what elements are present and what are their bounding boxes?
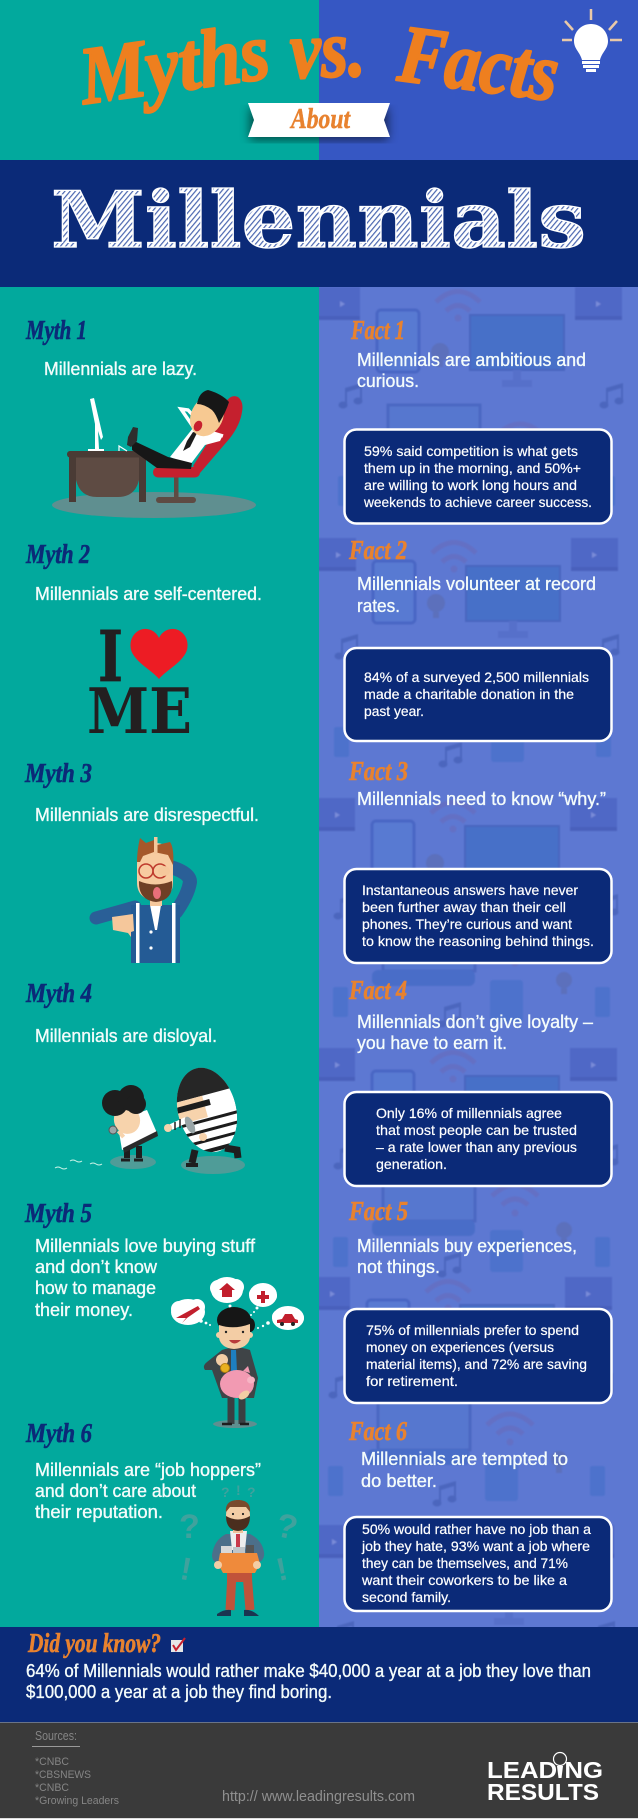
ribbon: About: About bbox=[289, 103, 351, 135]
card: fact 2 detail: past year. bbox=[364, 703, 424, 719]
card: fact 1 detail: 59% said competition is what gets bbox=[364, 443, 578, 459]
logo: Leading Results bbox=[487, 1752, 603, 1805]
text: fact 1 statement: curious. bbox=[357, 370, 419, 391]
card: fact 4 detail: – a rate lower than any previous bbox=[376, 1139, 577, 1155]
heading: Fact 5: Fact 5 bbox=[348, 1196, 408, 1226]
illustration: man carrying box: ? bbox=[273, 1506, 301, 1548]
card: fact 3 detail bbox=[344, 869, 612, 963]
panel: fact 1 bbox=[344, 315, 612, 524]
panel: myth 4 bbox=[25, 978, 256, 1174]
card: fact 1 detail: weekends to achieve career success. bbox=[363, 494, 592, 510]
text: myth 3 statement: Millennials are disrespectful. bbox=[35, 804, 259, 825]
card: fact 6 detail: second family. bbox=[362, 1589, 451, 1605]
card: fact 6 detail: want their coworkers to be like a bbox=[361, 1572, 567, 1588]
illustration: detective and thief bbox=[54, 1068, 245, 1174]
text: fact 5 statement bbox=[357, 1235, 577, 1277]
text: myth 5 statement: their money. bbox=[35, 1299, 133, 1320]
text: fact 1 statement: Millennials are ambitious and bbox=[357, 349, 586, 370]
heading: Did you know?: Did you know? bbox=[27, 1628, 161, 1658]
text: fact 2 statement: Millennials volunteer at record bbox=[357, 573, 596, 594]
text: fact 5 statement: Millennials buy experiences, bbox=[357, 1235, 577, 1256]
card: fact 5 detail: money on experiences (versus bbox=[366, 1339, 554, 1355]
card: fact 5 detail: for retirement. bbox=[366, 1373, 458, 1389]
illustration: man carrying box: ! bbox=[236, 1482, 241, 1498]
text: myth 6 statement bbox=[35, 1459, 261, 1522]
illustration: I love me bbox=[87, 615, 192, 748]
text: myth 6 statement: Millennials are “job hoppers” bbox=[35, 1459, 261, 1480]
card: fact 4 detail: generation. bbox=[376, 1156, 447, 1172]
text: myth 5 statement: and don’t know bbox=[35, 1256, 158, 1277]
heading: Fact 1: Fact 1 bbox=[350, 315, 405, 345]
text: myth 1 statement: Millennials are lazy. bbox=[44, 358, 197, 379]
card: fact 6 detail bbox=[344, 1517, 612, 1611]
text: did you know statement bbox=[26, 1660, 591, 1702]
text: fact 4 statement bbox=[357, 1011, 594, 1053]
text: sources: *Growing Leaders bbox=[35, 1795, 119, 1807]
heading: Fact 2: Fact 2 bbox=[348, 535, 407, 565]
panel: fact 5 bbox=[344, 1196, 612, 1403]
panel: myth 1 bbox=[25, 315, 256, 518]
card: fact 1 detail: are willing to work long hours and bbox=[364, 477, 577, 493]
panel: fact 4 bbox=[344, 975, 612, 1186]
card: fact 1 detail: them up in the morning, and 50%+ bbox=[364, 460, 581, 476]
card: fact 3 detail: phones. They’re curious and want bbox=[362, 916, 572, 932]
card: fact 3 detail: been further away than their cell bbox=[362, 899, 566, 915]
text: fact 6 statement bbox=[361, 1448, 568, 1491]
illustration: man carrying box: ? bbox=[247, 1484, 256, 1500]
card: fact 2 detail: made a charitable donation in the bbox=[364, 686, 574, 702]
illustration: man carrying box: ? bbox=[179, 1508, 200, 1546]
illustration: I love me: ME bbox=[87, 674, 192, 748]
heading: Myth 1: Myth 1 bbox=[25, 315, 87, 345]
title: Myths vs. Facts: vs. bbox=[288, 2, 367, 96]
panel: footer bbox=[0, 1722, 638, 1819]
panel: myth 2 bbox=[25, 539, 262, 748]
text: myth 6 statement: their reputation. bbox=[35, 1501, 163, 1522]
card: fact 4 detail: that most people can be trusted bbox=[376, 1122, 577, 1138]
background: header right blue bbox=[319, 0, 638, 160]
card: fact 5 detail: material items), and 72% are saving bbox=[366, 1356, 587, 1372]
card: fact 2 detail: 84% of a surveyed 2,500 millennials bbox=[364, 669, 589, 685]
text: fact 6 statement: do better. bbox=[361, 1470, 437, 1491]
card: fact 5 detail bbox=[344, 1309, 612, 1403]
illustration: man carrying box: ? bbox=[221, 1484, 230, 1500]
illustration: man carrying box: ! bbox=[273, 1550, 291, 1588]
background: header left teal bbox=[0, 0, 319, 160]
text: fact 1 statement bbox=[357, 349, 586, 391]
title: Myths vs. Facts: Facts bbox=[393, 8, 564, 119]
heading: Fact 4: Fact 4 bbox=[348, 975, 407, 1005]
heading: Myth 2: Myth 2 bbox=[25, 539, 90, 569]
heading: Fact 3: Fact 3 bbox=[348, 756, 408, 786]
text: did you know statement: $100,000 a year at a job they find boring. bbox=[26, 1681, 332, 1702]
heading: Myth 3: Myth 3 bbox=[24, 758, 92, 788]
title: Myths vs. Facts: Myths bbox=[72, 5, 275, 122]
text: fact 2 statement: rates. bbox=[357, 595, 400, 616]
text: myth 5 statement: how to manage bbox=[35, 1277, 156, 1298]
illustration: man carrying box: ! bbox=[178, 1550, 194, 1588]
card: fact 6 detail: they can be themselves, and 71% bbox=[362, 1555, 568, 1571]
panel: did you know bbox=[0, 1627, 638, 1722]
illustration: man carrying box bbox=[178, 1482, 301, 1616]
card: fact 6 detail: job they hate, 93% want a job where bbox=[361, 1538, 590, 1554]
illustration: I love me: I bbox=[98, 615, 123, 698]
heading: Myth 5: Myth 5 bbox=[24, 1198, 92, 1228]
heading: Myth 6: Myth 6 bbox=[25, 1418, 92, 1448]
logo: Leading Results: RESULTS bbox=[487, 1779, 599, 1805]
text: myth 4 statement: Millennials are disloyal. bbox=[35, 1025, 217, 1046]
illustration: lazy man at desk bbox=[52, 390, 256, 518]
text: fact 4 statement: Millennials don’t give loyalty – bbox=[357, 1011, 594, 1032]
card: fact 4 detail: Only 16% of millennials agree bbox=[376, 1105, 562, 1121]
background: device icon pattern bbox=[295, 287, 624, 1754]
illustration: man with piggy bank and wishes bbox=[171, 1277, 304, 1428]
background: myths column bbox=[0, 287, 319, 1627]
title band: Millennials bbox=[0, 160, 638, 287]
illustration: man making loser gesture bbox=[96, 837, 190, 963]
logo: Leading Results: LEAD NG bbox=[487, 1757, 603, 1783]
panel: fact 3 bbox=[344, 756, 612, 963]
text: fact 4 statement: you have to earn it. bbox=[357, 1032, 507, 1053]
card: fact 5 detail: 75% of millennials prefer to spend bbox=[366, 1322, 579, 1338]
icon: checkbox bbox=[171, 1638, 185, 1652]
card: fact 3 detail: to know the reasoning behind things. bbox=[362, 933, 594, 949]
card: fact 6 detail: 50% would rather have no job than a bbox=[362, 1521, 591, 1537]
text: sources: *CNBC bbox=[35, 1782, 69, 1794]
text: sources: *CNBC bbox=[35, 1756, 69, 1768]
ribbon: About bbox=[248, 103, 390, 140]
text: myth 6 statement: and don’t care about bbox=[35, 1480, 196, 1501]
text: sources bbox=[32, 1728, 119, 1807]
card: fact 2 detail bbox=[344, 648, 612, 741]
title band: Millennials: Millennials bbox=[51, 175, 586, 266]
panel: myth 3 bbox=[24, 758, 259, 963]
text: website url: http:// www.leadingresults.com bbox=[222, 1788, 415, 1805]
text: fact 3 statement: Millennials need to know “why.” bbox=[357, 788, 606, 809]
card: fact 3 detail: Instantaneous answers have never bbox=[362, 882, 578, 898]
text: fact 2 statement bbox=[357, 573, 596, 616]
panel: fact 6 bbox=[344, 1416, 612, 1611]
panel: myth 6 bbox=[25, 1418, 301, 1616]
panel: fact 2 bbox=[344, 535, 612, 741]
text: myth 5 statement: Millennials love buying stuff bbox=[35, 1235, 256, 1256]
text: sources: *CBSNEWS bbox=[35, 1769, 91, 1781]
card: fact 1 detail bbox=[344, 430, 612, 524]
card: fact 4 detail bbox=[344, 1092, 612, 1186]
text: myth 5 statement bbox=[35, 1235, 256, 1320]
panel: myth 5 bbox=[24, 1198, 304, 1428]
heading: Myth 4: Myth 4 bbox=[25, 978, 92, 1008]
icon: light bulb bbox=[562, 9, 622, 72]
heading: Fact 6: Fact 6 bbox=[348, 1416, 407, 1446]
text: myth 2 statement: Millennials are self-centered. bbox=[35, 583, 262, 604]
title: Myths vs. Facts bbox=[72, 2, 564, 122]
text: did you know statement: 64% of Millennials would rather make $40,000 a year at a job they love than bbox=[26, 1660, 591, 1681]
text: sources: Sources: bbox=[35, 1728, 77, 1743]
text: fact 5 statement: not things. bbox=[357, 1256, 440, 1277]
text: fact 6 statement: Millennials are tempted to bbox=[361, 1448, 568, 1469]
background: facts column bbox=[319, 287, 638, 1627]
